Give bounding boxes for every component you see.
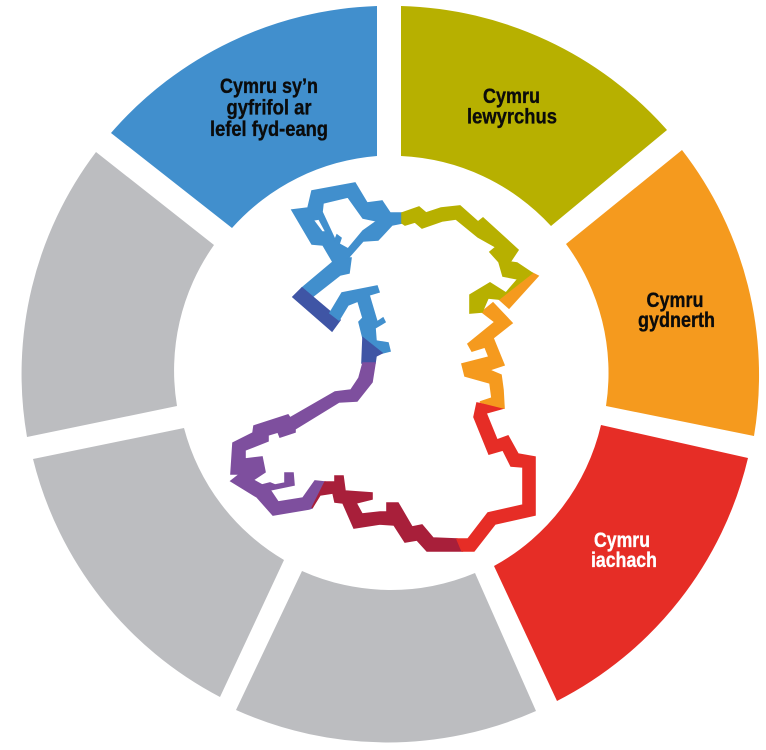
panel: grey bottom segment <box>236 571 536 742</box>
map of Wales outline <box>231 183 538 551</box>
label: Cymru iachach <box>591 529 657 572</box>
map: olive north coast <box>402 206 532 313</box>
label: Cymru gydnerth <box>638 289 715 332</box>
map: blue north-west coast <box>292 183 402 297</box>
map: dark blue west segment <box>362 338 382 363</box>
label: Cymru sy'n gyfrifol ar lefel fyd-eang: Cymru sy’n <box>220 75 318 98</box>
label: Cymru sy'n gyfrifol ar lefel fyd-eang: lefel fyd-eang <box>210 118 328 141</box>
map: orange east border <box>462 273 538 408</box>
map: purple south-west coast <box>231 363 375 515</box>
panel: orange segment, resilient Wales <box>566 150 759 436</box>
panel: grey upper-left segment <box>22 152 214 437</box>
label: Cymru iachach: Cymru <box>594 529 650 552</box>
map: dark blue Llyn segment <box>293 288 340 331</box>
label: Cymru sy'n gyfrifol ar lefel fyd-eang: gyfrifol ar <box>226 96 312 120</box>
label: Cymru lewyrchus <box>467 85 557 128</box>
panel: red segment, healthier Wales <box>494 425 748 701</box>
label: Cymru sy'n gyfrifol ar lefel fyd-eang <box>210 75 328 141</box>
label: Cymru lewyrchus: lewyrchus <box>467 106 557 128</box>
map: dark red south coast <box>312 476 462 551</box>
label: Cymru gydnerth: Cymru <box>646 289 704 312</box>
label: Cymru gydnerth: gydnerth <box>638 309 715 332</box>
panel: grey lower-left segment <box>33 428 284 697</box>
panel: blue segment, globally responsible Wales <box>111 6 377 228</box>
map: red south-east border <box>457 403 535 551</box>
panel: olive segment, prosperous Wales <box>401 6 667 226</box>
map: blue Cardigan coast <box>330 286 390 353</box>
label: Cymru lewyrchus: Cymru <box>483 85 540 108</box>
label: Cymru iachach: iachach <box>591 549 657 572</box>
